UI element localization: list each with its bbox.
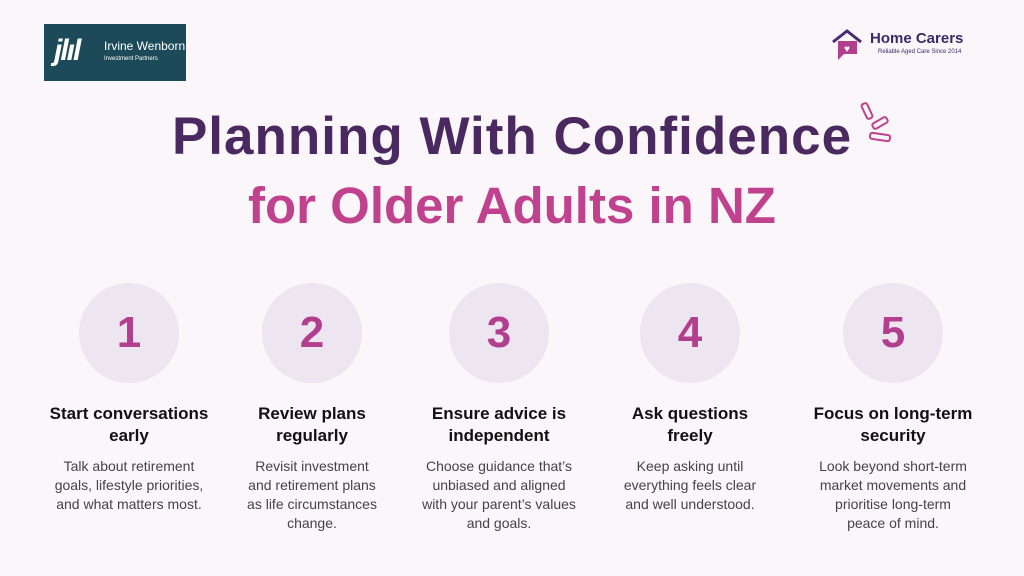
- icon: sparkle: [860, 102, 892, 142]
- step 4: everything feels clear: [624, 477, 756, 493]
- step 2: 2: [300, 308, 324, 357]
- step 4: Ask questions: [632, 404, 748, 423]
- step 2: change.: [287, 515, 337, 531]
- step 4: freely: [667, 426, 713, 445]
- step 3: Ensure advice is: [432, 404, 566, 423]
- step 5: market movements and: [820, 477, 966, 493]
- logo: Irvine Wenborn: [44, 24, 186, 81]
- logo: Irvine Wenborn: jlıl: [54, 34, 79, 67]
- step 5: 5: [881, 308, 905, 357]
- step 2: as life circumstances: [247, 496, 377, 512]
- step 3: independent: [448, 426, 550, 445]
- logo: Irvine Wenborn: Irvine Wenborn: [104, 39, 185, 53]
- step 4: Keep asking until: [637, 458, 743, 474]
- step 1: and what matters most.: [56, 496, 202, 512]
- logo: Home Carers: Home Carers: [870, 30, 963, 47]
- step 2: regularly: [276, 426, 348, 445]
- step 4: [624, 283, 756, 512]
- step 3: with your parent’s values: [422, 496, 576, 512]
- step 5: Look beyond short-term: [819, 458, 967, 474]
- logo: Home Carers: ♥: [844, 44, 850, 55]
- step 3: unbiased and aligned: [432, 477, 566, 493]
- step 3: and goals.: [467, 515, 531, 531]
- step 4: and well understood.: [625, 496, 755, 512]
- step 2: [247, 283, 377, 531]
- logo: Home Carers: Reliable Aged Care Since 2014: [878, 49, 961, 55]
- logo: Irvine Wenborn: Investment Partners: [104, 56, 158, 62]
- step 1: Start conversations: [50, 404, 208, 423]
- step 3: [422, 283, 576, 531]
- step 4: 4: [678, 308, 702, 357]
- step 1: 1: [117, 308, 141, 357]
- step 5: security: [860, 426, 926, 445]
- step 2: and retirement plans: [248, 477, 376, 493]
- step 2: Review plans: [258, 404, 366, 423]
- step 1: Talk about retirement: [64, 458, 194, 474]
- step 1: goals, lifestyle priorities,: [55, 477, 203, 493]
- step 5: prioritise long-term: [835, 496, 951, 512]
- title: Planning With Confidence: [172, 107, 852, 166]
- step 5: Focus on long-term: [814, 404, 972, 423]
- step 1: early: [109, 426, 149, 445]
- step 3: Choose guidance that’s: [426, 458, 572, 474]
- logo: Home Carers: [832, 29, 963, 60]
- subtitle: for Older Adults in NZ: [248, 177, 776, 234]
- step 2: Revisit investment: [255, 458, 369, 474]
- step 1: [50, 283, 208, 512]
- step 3: 3: [487, 308, 511, 357]
- step 5: peace of mind.: [847, 515, 939, 531]
- step 5: [814, 283, 972, 531]
